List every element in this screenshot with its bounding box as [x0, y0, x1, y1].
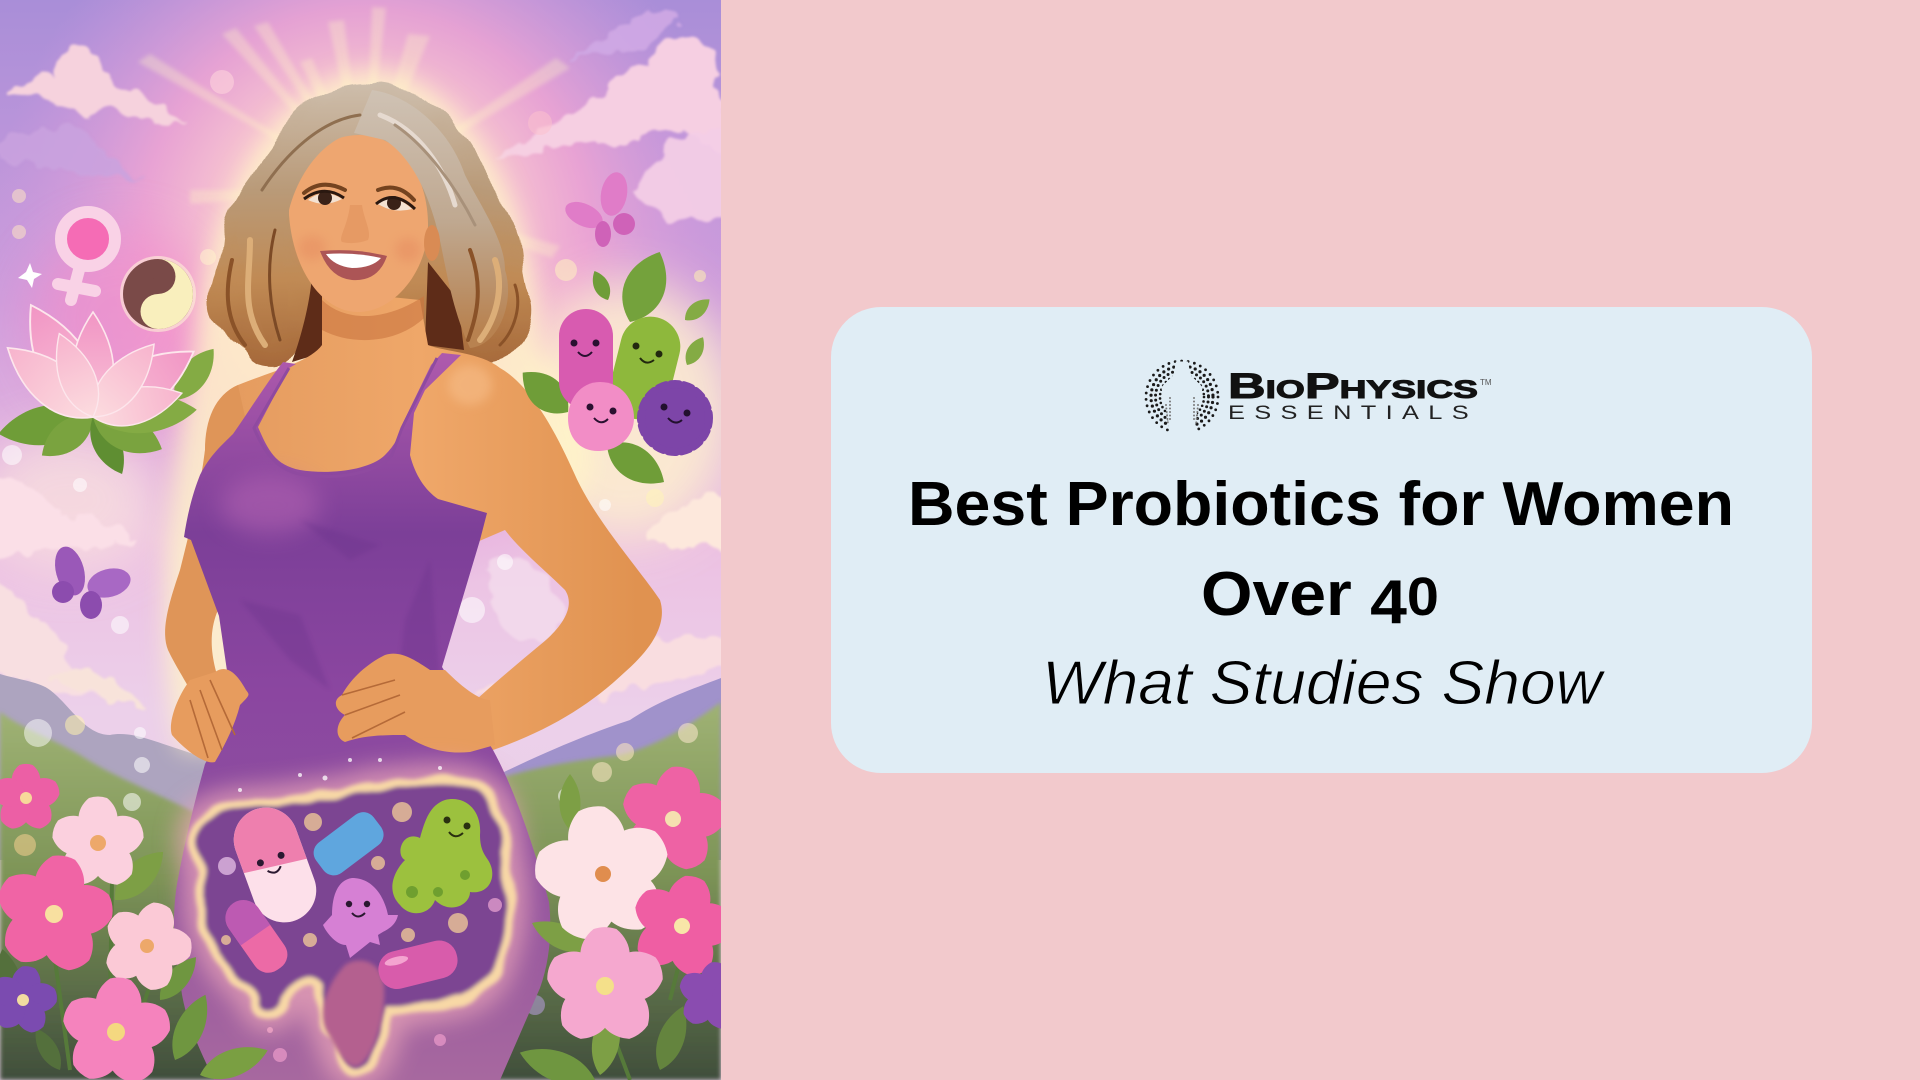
eyes and brows: [304, 185, 415, 211]
right hand: [336, 654, 495, 753]
green bacterium: [392, 799, 492, 913]
small left capsule: [218, 893, 294, 979]
neckline band: [254, 358, 437, 476]
smile: [320, 250, 387, 280]
shoulder highlight: [448, 365, 492, 405]
probiotic characters cluster: [512, 244, 714, 496]
mountains and meadow: [0, 674, 721, 1080]
pink blob character: [568, 382, 634, 451]
dress fold shading: [240, 520, 440, 700]
bokeh dots: [2, 70, 706, 1051]
trademark: TM: [1480, 378, 1492, 387]
female symbol icon: [58, 212, 115, 300]
title line 1: Best Probiotics for Women: [908, 470, 1734, 539]
illustration panel: woman with probiotics: [0, 0, 721, 1080]
lotus leaves: [0, 341, 224, 480]
lilac ghost bacterium: [323, 878, 398, 958]
front hair left: [237, 90, 372, 345]
clouds: [0, 9, 730, 705]
background sky with glow: [0, 0, 735, 1080]
meadow flowers: [0, 757, 754, 1080]
front hair right: [354, 90, 508, 348]
sparkle: [18, 263, 42, 288]
back hair: [209, 84, 535, 366]
purple character: [641, 384, 709, 452]
pink flower: [0, 764, 63, 834]
logo wordmark: B IO P HYSICS: [1228, 367, 1478, 406]
title line 2: Over: [1201, 560, 1342, 629]
gut illustration on dress: [194, 758, 510, 1071]
butterfly left: [50, 543, 134, 619]
small right capsule: [375, 937, 461, 993]
right light pink flower: [541, 927, 669, 1048]
hair strands: [228, 115, 518, 345]
butterfly top right: [561, 170, 635, 247]
pale flower: [48, 796, 148, 892]
bottom pink flower: [52, 973, 179, 1080]
yin yang icon: [120, 256, 196, 332]
chin shadow on neck: [322, 296, 424, 340]
gut bokeh: [218, 758, 502, 1062]
pink rod character: [559, 309, 613, 409]
cheek blush: [298, 236, 421, 262]
tank top and dress: [174, 353, 550, 1080]
dark under hair: [292, 262, 464, 362]
cluster leaves: [512, 244, 714, 496]
nose: [341, 205, 369, 243]
right pink flower: [607, 757, 738, 884]
card panel: [831, 307, 1812, 773]
purple flower: [0, 960, 65, 1042]
left hand: [171, 669, 248, 762]
logo subline: ESSENTIALS: [1228, 403, 1478, 424]
subtitle: What Studies Show: [1042, 649, 1606, 718]
body glow: [165, 70, 593, 750]
bust highlight: [220, 475, 320, 535]
face: [289, 135, 428, 312]
ear: [424, 225, 440, 261]
lotus petals: [0, 293, 206, 437]
logo: BioPhysics Essentials: [1146, 361, 1492, 433]
finger lines: [190, 680, 405, 758]
title line 2: 0: [1407, 567, 1439, 627]
right purple flower: [669, 956, 754, 1038]
white flower: [519, 794, 688, 958]
gut shape: [194, 781, 510, 1071]
title line 2: 4: [1370, 568, 1407, 637]
logo dotted body icon: [1146, 361, 1218, 433]
stems and leaves: [0, 774, 695, 1080]
lower gut: [323, 961, 384, 1066]
right lower pink flower: [615, 863, 748, 992]
left arm: [165, 385, 248, 690]
green character: [603, 310, 687, 426]
pale peach flower: [86, 888, 208, 1007]
large pink flower: [0, 845, 127, 986]
pink capsule with face: [225, 799, 325, 931]
blue pill: [308, 807, 389, 881]
woman figure: [165, 84, 662, 1080]
lotus flower: [0, 293, 224, 480]
gut glow: [194, 781, 510, 1071]
right arm and chest skin: [200, 290, 662, 752]
